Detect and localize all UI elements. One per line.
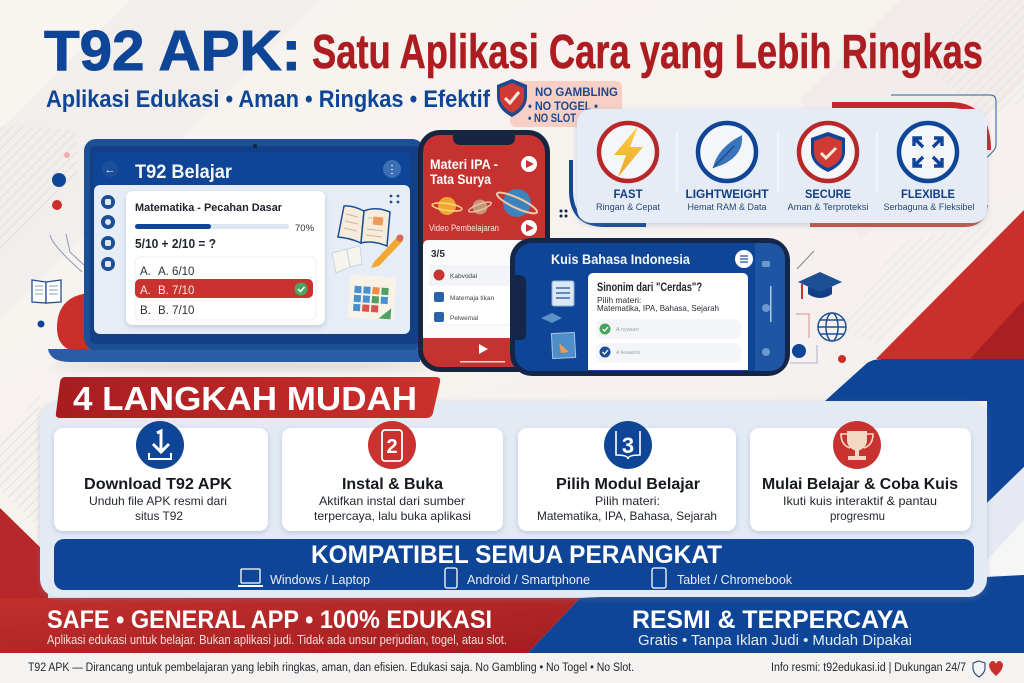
step 3 [518, 421, 736, 531]
question card [588, 273, 748, 370]
feature: lightweight: Hemat RAM & Data [688, 202, 767, 213]
phone: materi IPA: Kabvodal [450, 273, 478, 280]
left decorations [32, 152, 92, 350]
laptop header: ← [104, 164, 116, 176]
quiz card [126, 191, 325, 325]
feature: secure: SECURE [805, 189, 851, 201]
question card: Sinonim dari "Cerdas"? [597, 280, 702, 294]
step 2: Aktifkan instal dari sumber [319, 494, 465, 508]
step 3: Pilih materi: [595, 494, 660, 508]
safe message: SAFE • GENERAL APP • 100% EDUKASI [47, 606, 492, 634]
step 2 [282, 421, 503, 531]
compatibility bar: KOMPATIBEL SEMUA PERANGKAT [311, 541, 722, 569]
icon: tablet [652, 568, 666, 588]
quiz card: A. 6/10 [158, 266, 194, 278]
step 3: Matematika, IPA, Bahasa, Sejarah [537, 509, 717, 523]
phone: materi IPA: Pelwemal [450, 315, 479, 322]
step 3: 3 [622, 433, 634, 458]
title [44, 19, 983, 83]
calendar illustration [348, 274, 396, 321]
question card: A nyasan [616, 327, 639, 333]
feature: lightweight [686, 123, 768, 213]
step 2: 2 [386, 436, 398, 458]
phone: kuis bahasa indonesia [510, 238, 790, 376]
compatibility bar [54, 539, 974, 590]
steps panel [40, 401, 987, 597]
phone: materi IPA: 3/5 [431, 249, 445, 260]
heading: 4 langkah mudah: 4 LANGKAH MUDAH [73, 380, 417, 417]
feature: secure [788, 123, 868, 213]
compatibility bar: Windows / Laptop [270, 573, 370, 587]
quiz card: 5/10 + 2/10 = ? [135, 236, 216, 251]
icon: phone [445, 568, 457, 588]
step 4 [750, 421, 971, 531]
step 1: Unduh file APK resmi dari [89, 494, 227, 508]
laptop sidebar [101, 195, 115, 271]
bottom bands [0, 575, 1024, 653]
compatibility bar: Android / Smartphone [467, 573, 590, 587]
feature: flexible [884, 123, 974, 213]
laptop [48, 139, 424, 362]
trusted message: Gratis • Tanpa Iklan Judi • Mudah Dipakai [638, 632, 912, 649]
icon: shield [973, 661, 985, 677]
feature: secure: Aman & Terproteksi [788, 202, 868, 213]
feature: fast: Ringan & Cepat [596, 202, 660, 213]
quiz card: B. 7/10 [158, 305, 194, 317]
trusted message [632, 606, 912, 649]
step 1: Download T92 APK [84, 476, 232, 493]
step 2: Instal & Buka [342, 476, 443, 493]
icon: globe [818, 313, 846, 341]
safe message: Aplikasi edukasi untuk belajar. Bukan aplikasi judi. Tidak ada unsur perjudian, togel, atau slot. [47, 633, 507, 647]
question card: A leaaeox [616, 350, 640, 356]
feature: fast [596, 123, 660, 213]
icon: laptop [238, 569, 263, 586]
step 1 [54, 421, 268, 531]
step 4: progresmu [830, 509, 885, 523]
right decorations [560, 210, 846, 363]
phone: materi IPA: Video Pembelajaran [429, 223, 499, 233]
laptop header: T92 Belajar [135, 162, 233, 183]
planets [432, 189, 539, 217]
no gambling badge [497, 79, 622, 127]
quiz card: B. 7/10 [158, 285, 194, 297]
step 4: Ikuti kuis interaktif & pantau [783, 494, 937, 508]
phone: materi IPA: Matemaja tikan [450, 295, 494, 302]
step 4: Mulai Belajar & Coba Kuis [762, 476, 958, 493]
no gambling badge: • NO TOGEL • [528, 99, 598, 113]
phone: materi IPA: Tata Surya [430, 171, 491, 187]
quiz card: A. [140, 285, 151, 297]
question card: Pilih materi: [597, 295, 641, 305]
subtitle: Aplikasi Edukasi • Aman • Ringkas • Efektif [46, 86, 491, 113]
phone: materi IPA: Materi IPA - [430, 156, 498, 172]
footer: Info resmi: t92edukasi.id | Dukungan 24/7 [771, 662, 966, 674]
document and cap icons [541, 281, 576, 359]
feature: fast: FAST [614, 189, 642, 201]
feature: flexible: FLEXIBLE [901, 189, 955, 201]
quiz card: A. [140, 266, 151, 278]
footer [0, 653, 1024, 683]
no gambling badge: • NO SLOT [528, 111, 577, 125]
quiz card: 70% [295, 223, 315, 234]
quiz card: Matematika - Pecahan Dasar [135, 202, 283, 214]
title: T92 APK: [44, 19, 301, 83]
question card: Matematika, IPA, Bahasa, Sejarah [597, 303, 719, 313]
quiz card: B. [140, 305, 151, 317]
trusted message: RESMI & TERPERCAYA [632, 606, 909, 634]
phone: kuis bahasa indonesia: Kuis Bahasa Indonesia [551, 251, 690, 267]
safe message [47, 606, 507, 647]
feature: lightweight: LIGHTWEIGHT [686, 189, 768, 201]
icon: heart [989, 661, 1003, 676]
step 1: situs T92 [135, 509, 183, 523]
step 2: terpercaya, lalu buka aplikasi [314, 509, 471, 523]
laptop header [94, 152, 410, 192]
no gambling badge: NO GAMBLING [535, 85, 618, 99]
book and pencil illustration [332, 195, 404, 273]
compatibility bar: Tablet / Chromebook [677, 573, 793, 587]
feature: flexible: Serbaguna & Fleksibel [884, 202, 974, 213]
icon: graduation cap [798, 272, 842, 299]
step 3: Pilih Modul Belajar [556, 476, 700, 493]
footer: T92 APK — Dirancang untuk pembelajaran yang lebih ringkas, aman, dan efisien. Edukasi saja. No Gambling • No Togel • No Slot. [28, 662, 634, 674]
laptop base [48, 349, 420, 362]
phone: materi IPA [418, 130, 550, 372]
features panel [571, 95, 996, 225]
